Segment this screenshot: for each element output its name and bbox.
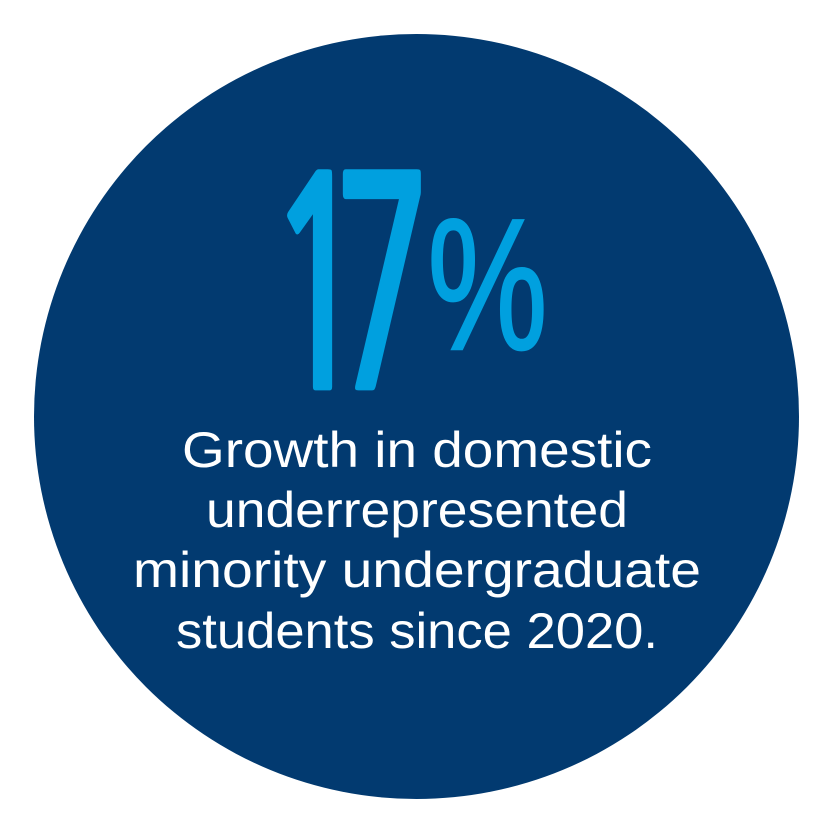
percent sign: % — [428, 179, 548, 389]
big number: digit 7: 7 — [332, 145, 433, 434]
description text: minority undergraduate — [133, 542, 701, 598]
description text: Growth in domestic — [182, 422, 652, 478]
big number: digit 1: 1 — [264, 146, 373, 434]
description text: underrepresented — [206, 482, 628, 538]
description text: students since 2020. — [176, 603, 658, 659]
description text — [133, 422, 701, 659]
